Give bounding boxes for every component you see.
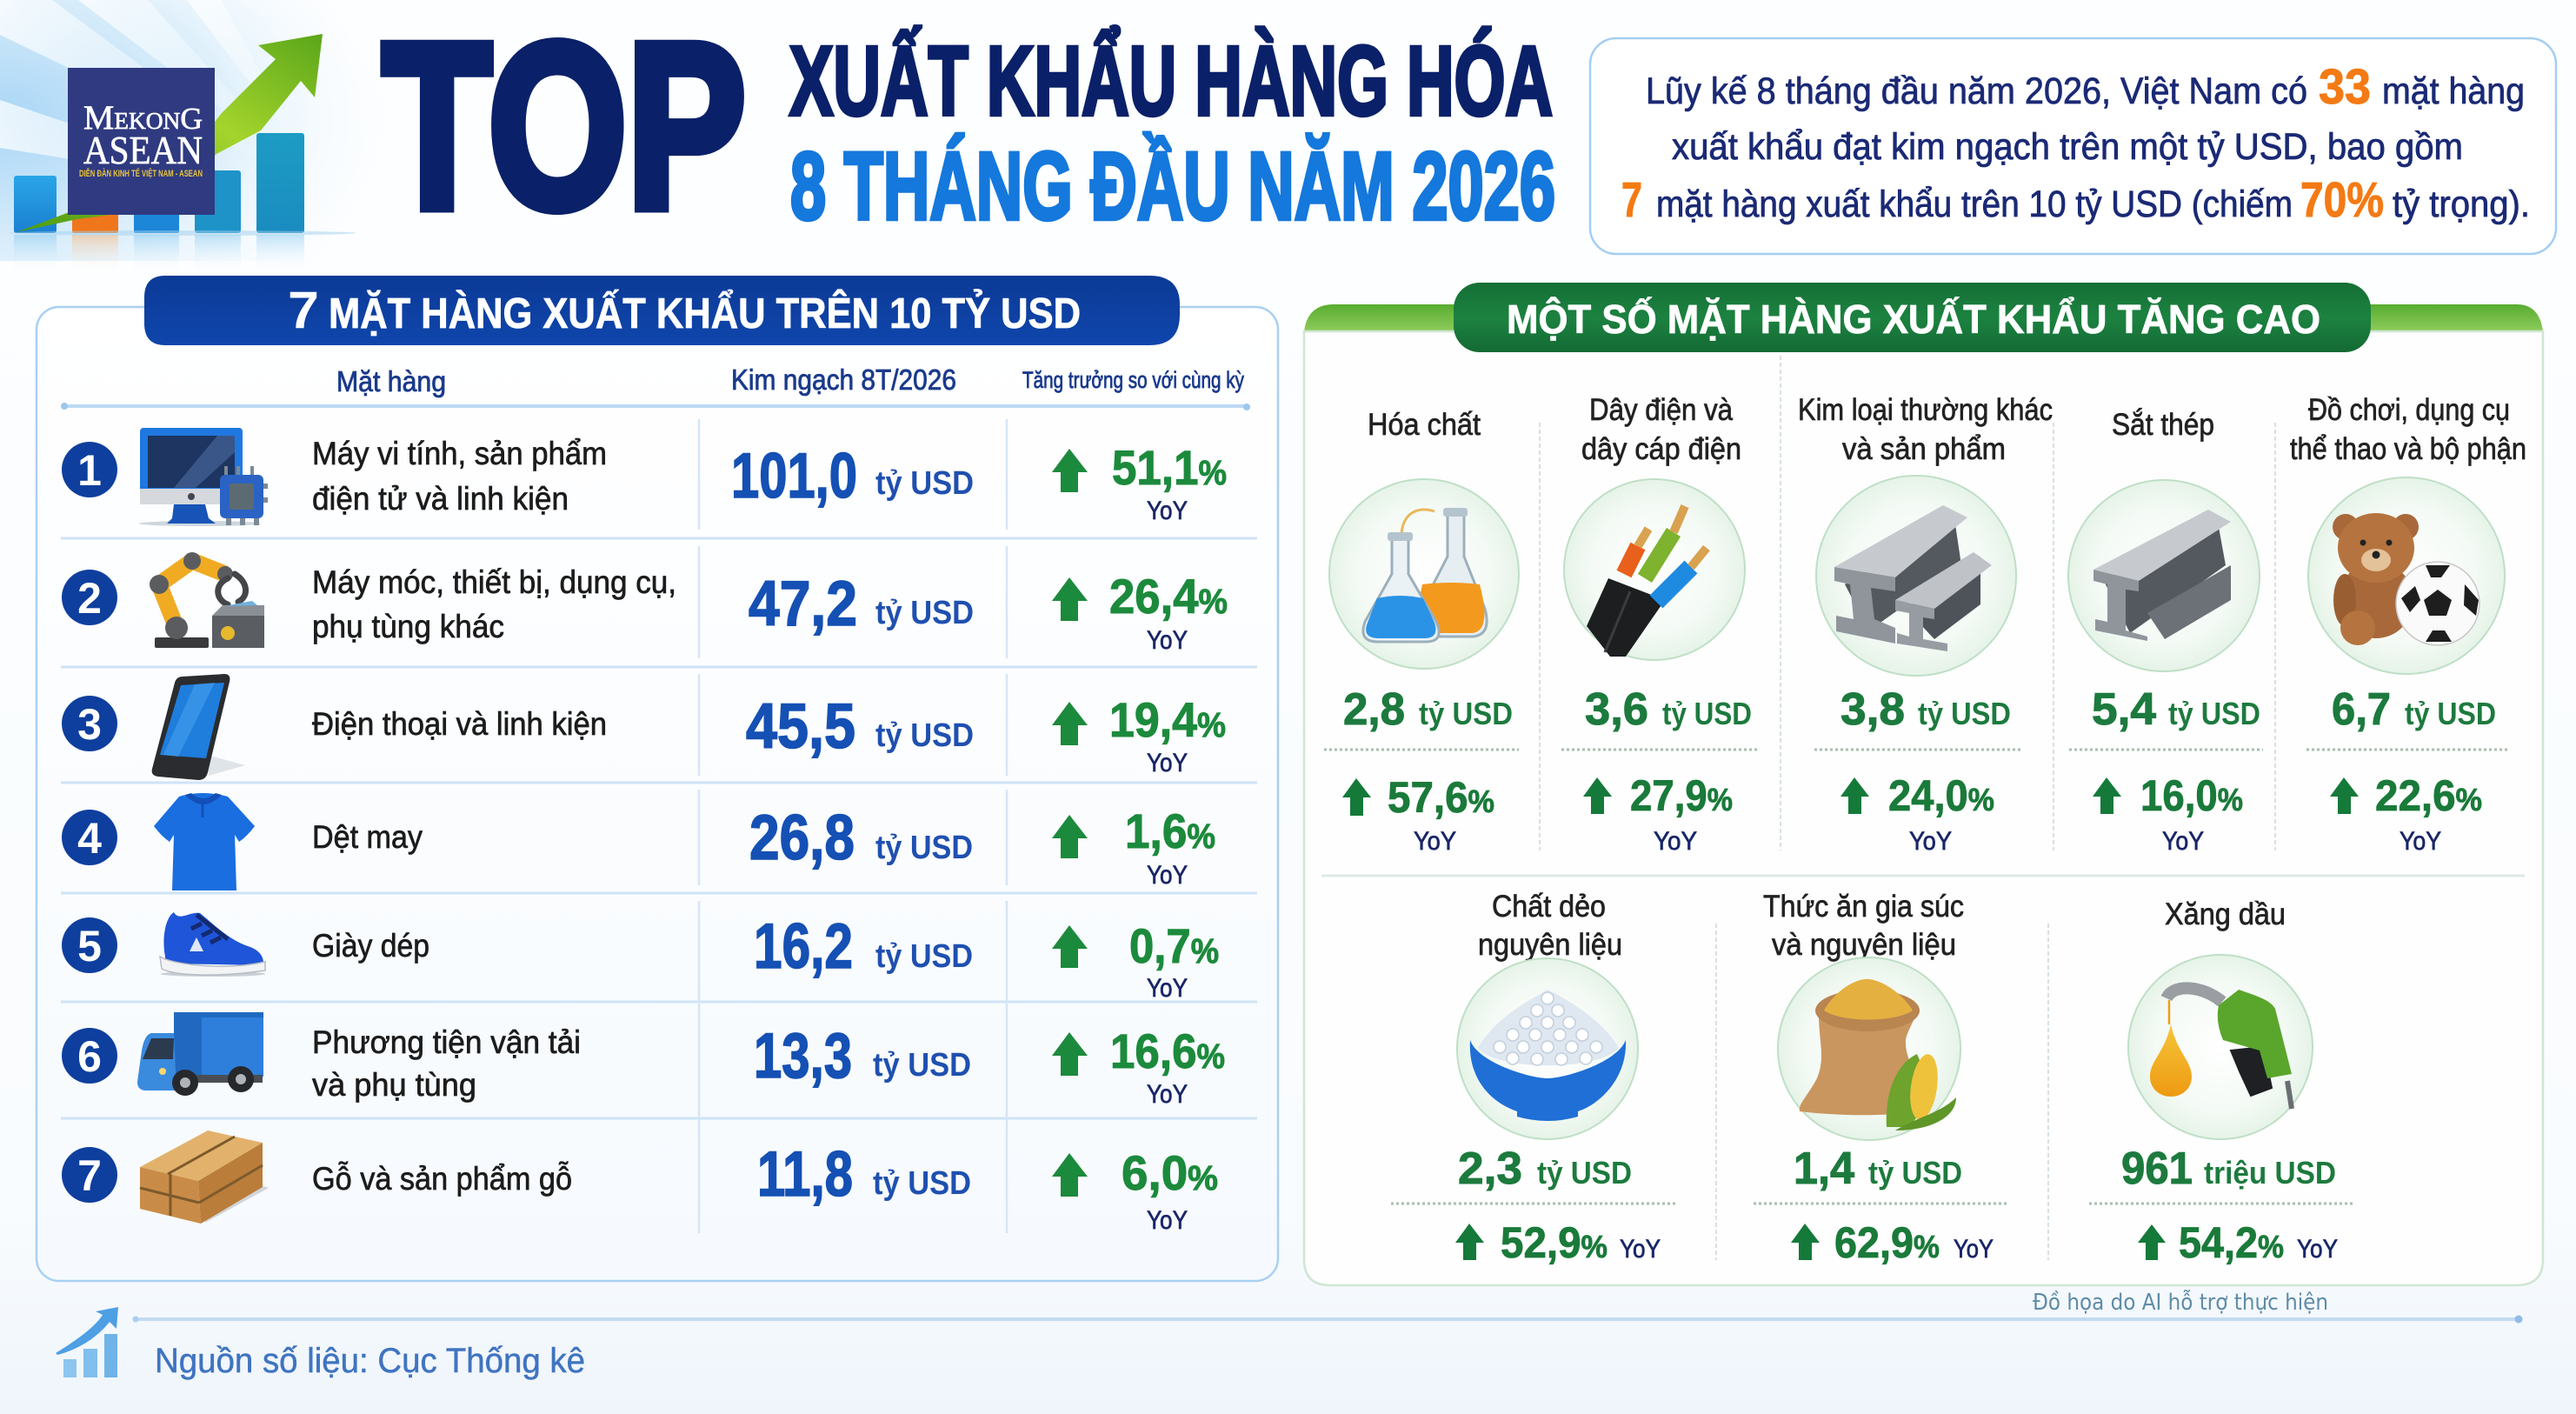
row 6: vehicles: Phương tiện vận tải — [312, 1024, 581, 1060]
row 2: machinery: tỷ USD — [875, 595, 974, 631]
row 4: textiles: 1,6% — [1125, 804, 1215, 858]
column headers: Mặt hàng — [336, 365, 446, 397]
row 1: computers: 1 — [77, 446, 102, 495]
item: other base metals — [1798, 393, 2053, 856]
row 4: textiles — [62, 793, 1215, 890]
title line 2: 8 THÁNG ĐẦU NĂM 2026 — [790, 133, 1555, 240]
row 5: footwear: 16,2 — [754, 911, 853, 982]
column headers: Tăng trưởng so với cùng kỳ — [1022, 367, 1244, 393]
row 5: footwear: 0,7% — [1129, 918, 1219, 973]
row 2: machinery: 47,2 — [749, 569, 857, 639]
item: iron and steel: tỷ USD — [2168, 696, 2260, 731]
row 7: wood: 6,0% — [1122, 1145, 1218, 1200]
item: iron and steel: YoY — [2162, 827, 2204, 856]
row 3: phones — [62, 674, 1226, 780]
panel banner — [144, 276, 1180, 345]
title: TOP: TOP — [383, 0, 746, 257]
item: animal feed: tỷ USD — [1868, 1155, 1962, 1191]
row 6: vehicles — [62, 1012, 1225, 1109]
item: toys and sports equipment: thể thao và bộ phận — [2290, 432, 2526, 466]
row 5: footwear: YoY — [1147, 974, 1188, 1003]
row 4: textiles: Dệt may — [312, 819, 423, 855]
panel banner — [1454, 283, 2371, 352]
panel: fast growing exports — [1304, 283, 2543, 1285]
item: plastics: YoY — [1620, 1235, 1661, 1264]
panel: 7 main export items — [37, 276, 1278, 1281]
row 7: wood — [62, 1131, 1218, 1235]
row 2: machinery: phụ tùng khác — [312, 609, 504, 644]
item: animal feed: 1,4 — [1794, 1144, 1854, 1194]
item: toys and sports equipment: 22,6% — [2375, 771, 2482, 820]
row 3: phones: 19,4% — [1109, 692, 1226, 747]
item: electric wires: 27,9% — [1630, 771, 1733, 820]
row 2: machinery — [62, 552, 1228, 655]
summary box: xuất khẩu đạt kim ngạch trên một tỷ USD, bao gồm — [1672, 126, 2463, 168]
row 4: textiles: YoY — [1147, 861, 1188, 890]
item: iron and steel: 5,4 — [2092, 684, 2156, 735]
row 4: textiles: 26,8 — [749, 803, 855, 873]
item: iron and steel: 16,0% — [2140, 771, 2243, 820]
item: other base metals: tỷ USD — [1918, 696, 2011, 731]
item: electric wires: dây cáp điện — [1581, 432, 1741, 466]
item: electric wires: Dây điện và — [1589, 393, 1733, 427]
summary box: 33 — [2319, 59, 2371, 115]
item: iron and steel — [2068, 408, 2263, 856]
item: chemicals: 57,6% — [1388, 773, 1494, 822]
row 2: machinery: YoY — [1147, 626, 1188, 655]
row 4: textiles: 4 — [77, 814, 102, 863]
item: chemicals: 2,8 — [1343, 684, 1405, 735]
item: plastics — [1391, 890, 1676, 1267]
row 2: machinery: 26,4% — [1109, 569, 1228, 624]
item: animal feed: YoY — [1954, 1235, 1994, 1264]
item: other base metals: YoY — [1909, 827, 1952, 856]
row 3: phones: Điện thoại và linh kiện — [312, 706, 607, 742]
panel banner: MỘT SỐ MẶT HÀNG XUẤT KHẨU TĂNG CAO — [1507, 297, 2320, 342]
item: toys and sports equipment: 6,7 — [2332, 684, 2391, 735]
item: animal feed: 62,9% — [1834, 1218, 1940, 1267]
item: toys and sports equipment — [2290, 393, 2526, 856]
item: other base metals: và sản phẩm — [1842, 432, 2006, 466]
item: chemicals: YoY — [1414, 827, 1456, 856]
row 1: computers: 51,1% — [1112, 440, 1227, 495]
row 6: vehicles: YoY — [1147, 1080, 1188, 1109]
row 1: computers — [62, 428, 1227, 526]
item: electric wires: YoY — [1654, 827, 1697, 856]
row 3: phones: 3 — [77, 700, 102, 749]
summary box: 70% — [2300, 172, 2384, 228]
item: petroleum: triệu USD — [2204, 1155, 2336, 1191]
panel banner: MẶT HÀNG XUẤT KHẨU TRÊN 10 TỶ USD — [329, 290, 1081, 337]
row 1: computers: YoY — [1147, 497, 1188, 525]
logo: Mekong Asean — [68, 68, 215, 215]
icon: footer growth chart — [56, 1307, 118, 1377]
item: toys and sports equipment: tỷ USD — [2405, 696, 2496, 731]
item: petroleum: 54,2% — [2179, 1218, 2284, 1267]
row 1: computers: Máy vi tính, sản phẩm — [312, 436, 607, 471]
row 2: machinery: 2 — [77, 574, 102, 623]
summary box: mặt hàng xuất khẩu trên 10 tỷ USD (chiếm — [1656, 183, 2293, 225]
row 6: vehicles: tỷ USD — [873, 1047, 971, 1084]
logo: Mekong Asean: DIỄN ĐÀN KINH TẾ VIỆT NAM - ASEAN — [79, 168, 203, 179]
row 7: wood: 7 — [77, 1151, 102, 1200]
item: toys and sports equipment: YoY — [2400, 827, 2441, 856]
row 1: computers: 101,0 — [731, 441, 857, 511]
row 6: vehicles: 6 — [77, 1032, 102, 1081]
panel banner: 7 — [288, 281, 319, 339]
item: chemicals: tỷ USD — [1419, 696, 1513, 731]
row 4: textiles: tỷ USD — [875, 830, 973, 866]
item: other base metals: Kim loại thường khác — [1798, 393, 2053, 427]
title line 1: XUẤT KHẨU HÀNG HÓA — [789, 26, 1553, 136]
item: other base metals: 3,8 — [1840, 684, 1905, 735]
summary box: 7 — [1621, 172, 1642, 228]
row 7: wood: tỷ USD — [873, 1165, 971, 1202]
header artwork: rays and bar chart with rising arrow — [0, 0, 417, 273]
row 5: footwear: Giày dép — [312, 928, 429, 964]
row 3: phones: tỷ USD — [875, 717, 974, 754]
item: animal feed — [1754, 890, 2008, 1267]
row 5: footwear — [62, 911, 1219, 1003]
item: chemicals — [1324, 408, 1519, 856]
item: animal feed: Thức ăn gia súc — [1763, 890, 1964, 924]
row 1: computers: điện tử và linh kiện — [312, 481, 569, 517]
item: plastics: 2,3 — [1458, 1144, 1522, 1194]
column headers: Kim ngạch 8T/2026 — [731, 364, 956, 396]
summary box: tỷ trọng). — [2393, 183, 2530, 225]
item: animal feed: và nguyên liệu — [1772, 928, 1956, 962]
item: chemicals: Hóa chất — [1368, 408, 1481, 442]
item: toys and sports equipment: Đồ chơi, dụng cụ — [2308, 393, 2510, 427]
row 7: wood: YoY — [1147, 1206, 1188, 1235]
item: electric wires: 3,6 — [1585, 684, 1648, 735]
item: petroleum: YoY — [2297, 1235, 2338, 1264]
attribution note: Đồ họa do AI hỗ trợ thực hiện — [2033, 1289, 2328, 1316]
item: electric wires — [1561, 393, 1759, 856]
column headers — [336, 364, 1244, 397]
footer rule — [132, 1315, 2523, 1324]
item: other base metals: 24,0% — [1888, 771, 1994, 820]
row 1: computers: tỷ USD — [875, 465, 974, 502]
item: plastics: tỷ USD — [1537, 1155, 1632, 1191]
logo: Mekong Asean: MEKONG — [83, 99, 203, 137]
summary box: mặt hàng — [2382, 70, 2525, 112]
item: petroleum — [2089, 897, 2353, 1267]
item: petroleum: Xăng dầu — [2165, 897, 2286, 931]
row 6: vehicles: và phụ tùng — [312, 1067, 476, 1103]
logo: Mekong Asean: ASEAN — [83, 128, 203, 172]
row 2: machinery: Máy móc, thiết bị, dụng cụ, — [312, 564, 676, 600]
item: plastics: nguyên liệu — [1478, 928, 1622, 962]
item: electric wires: tỷ USD — [1662, 696, 1752, 731]
row 7: wood: 11,8 — [757, 1139, 853, 1210]
row 6: vehicles: 16,6% — [1110, 1024, 1225, 1078]
row 3: phones: YoY — [1147, 749, 1188, 777]
item: plastics: 52,9% — [1501, 1218, 1608, 1267]
item: petroleum: 961 — [2121, 1144, 2193, 1194]
row 3: phones: 45,5 — [746, 691, 855, 762]
summary box — [1590, 38, 2556, 254]
row 5: footwear: 5 — [77, 922, 102, 970]
summary box: Lũy kế 8 tháng đầu năm 2026, Việt Nam có — [1646, 70, 2307, 112]
item: plastics: Chất dẻo — [1492, 890, 1606, 924]
item: iron and steel: Sắt thép — [2112, 408, 2214, 442]
row 7: wood: Gỗ và sản phẩm gỗ — [312, 1161, 572, 1197]
row 5: footwear: tỷ USD — [875, 938, 973, 975]
row 6: vehicles: 13,3 — [754, 1021, 852, 1091]
source text: Nguồn số liệu: Cục Thống kê — [155, 1342, 585, 1380]
